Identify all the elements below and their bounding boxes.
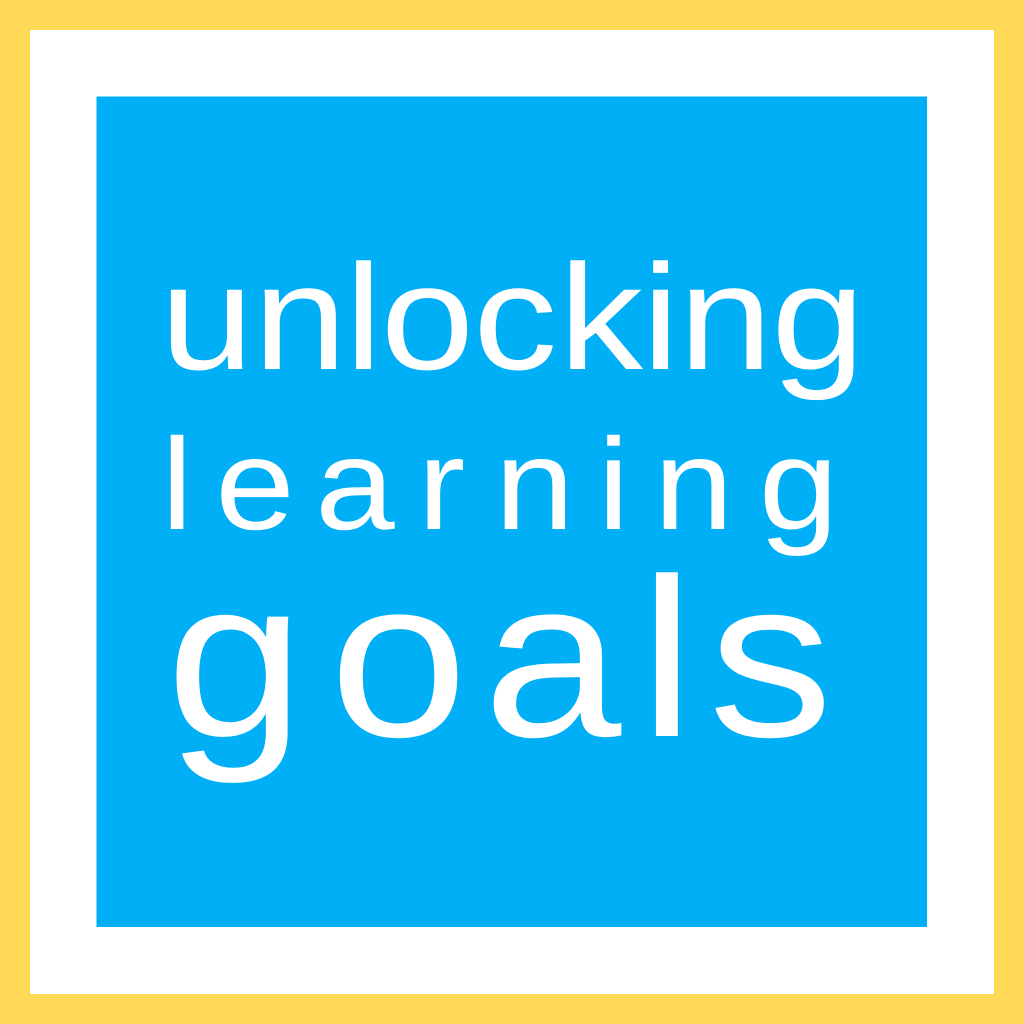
blue panel (96, 96, 927, 927)
title line: unlocking: unlocking (160, 233, 865, 401)
title (160, 233, 865, 785)
title line: goals: goals (166, 532, 833, 785)
title line: learning: learning (161, 411, 838, 557)
